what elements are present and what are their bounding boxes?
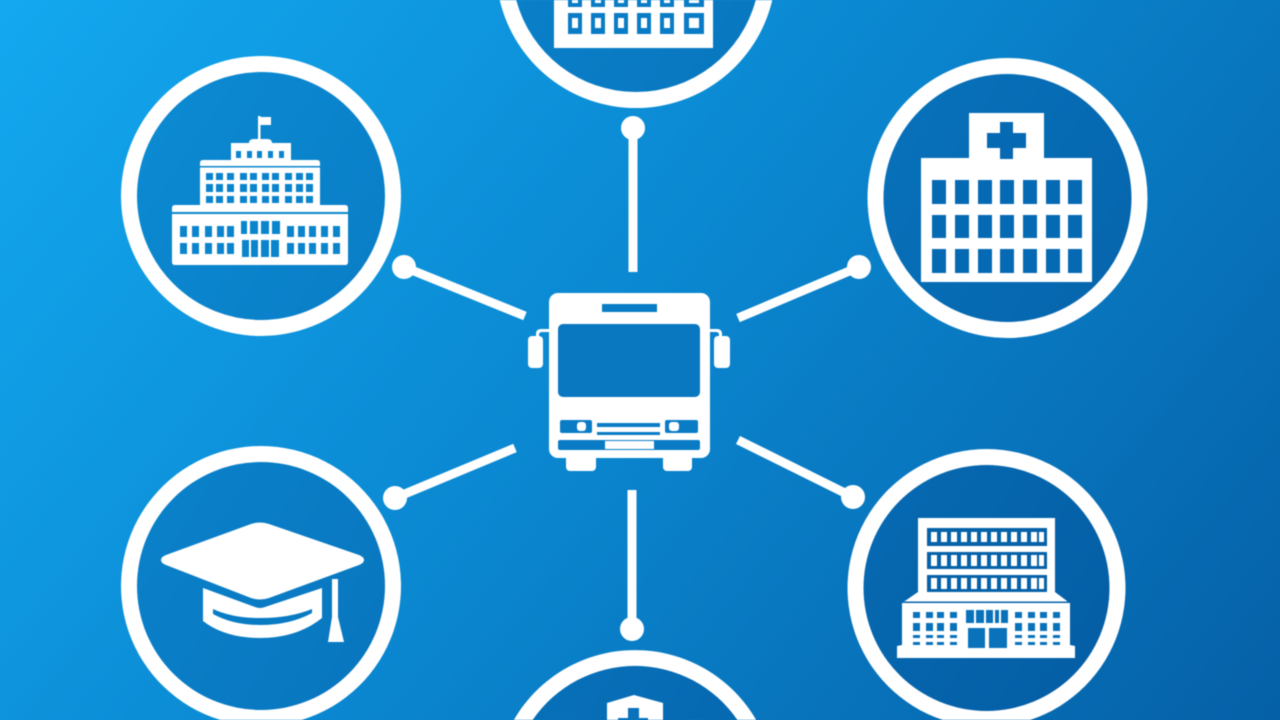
- icon: office block: [897, 518, 1075, 658]
- panel: top left government building: [129, 64, 393, 328]
- disc: [864, 465, 1110, 711]
- ring: [500, 0, 772, 108]
- ring: [514, 650, 756, 720]
- panel: bottom left education: [121, 446, 401, 720]
- connector: top left: [392, 255, 525, 316]
- disc: [137, 462, 385, 710]
- icon: apartment building: [554, 0, 713, 48]
- ring: [876, 66, 1140, 330]
- connector: bottom left: [383, 448, 515, 510]
- ring: [129, 64, 393, 328]
- panel: bottom right office block: [848, 449, 1126, 720]
- panel: bottom medical shield: [514, 650, 756, 720]
- disc: [516, 0, 756, 92]
- connector: bottom: [620, 490, 644, 641]
- bus windshield: [558, 324, 700, 397]
- bus mirrors: [528, 329, 730, 368]
- bus body: [549, 293, 710, 458]
- icon: graduation cap: [161, 522, 364, 642]
- bus wheels: [566, 450, 692, 471]
- connector: top: [621, 116, 645, 272]
- bus grille: [597, 423, 660, 435]
- bus headlights: [560, 420, 698, 433]
- icon: government building with flag: [172, 116, 348, 265]
- icon: medical shield: [607, 695, 663, 720]
- disc: [533, 666, 737, 720]
- bus bumper: [558, 440, 700, 450]
- connector: bottom right: [738, 440, 865, 509]
- panel: top building: [500, 0, 772, 108]
- ring: [848, 449, 1126, 720]
- ring: [121, 446, 401, 720]
- icon: central bus: [528, 293, 730, 471]
- connector: top right: [738, 255, 871, 318]
- bus destination sign: [602, 304, 657, 312]
- icon: hospital: [921, 113, 1092, 282]
- panel: top right hospital: [876, 66, 1140, 330]
